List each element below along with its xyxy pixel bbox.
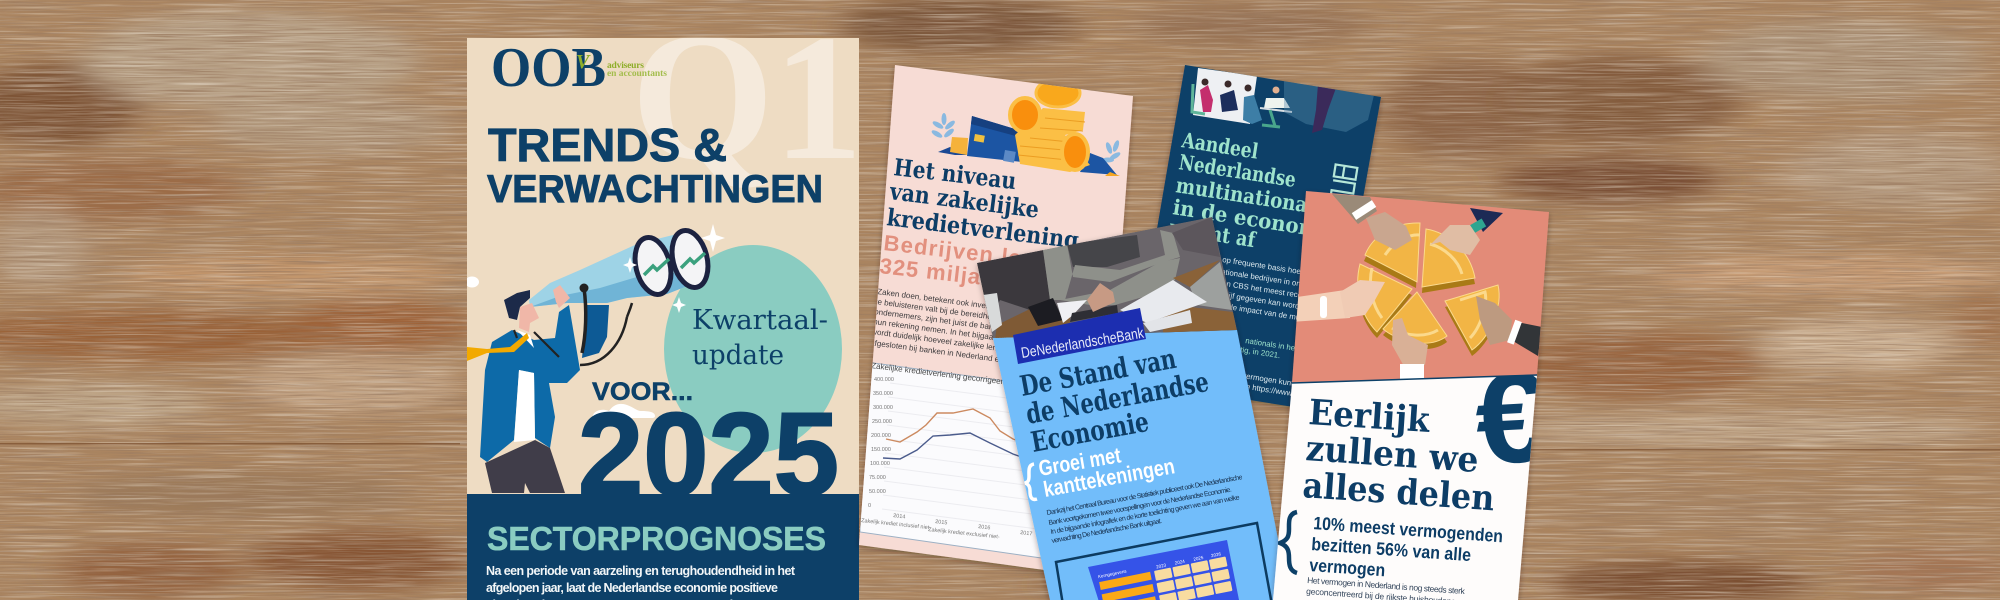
text block: blue intro: Bank voortgekomen twee voorspellingen voor de Nederlandse Economie. xyxy=(1048,486,1232,527)
heading: Het niveau: van zakelijke xyxy=(887,177,1041,224)
subheading: Bedrijven lenen xyxy=(880,235,1019,287)
text block: blue intro: Dankzij het Centraal Bureau voor de Statistiek publiceert ook De Nederlandsche xyxy=(1046,474,1243,517)
number: 2025: 2025 xyxy=(578,389,839,521)
heading: De Stand van de Nederlandse Economie: De Stand van xyxy=(1017,342,1179,403)
text block: navy intro: zie https://www.cbs.nl xyxy=(1240,381,1315,401)
watermark Q1 xyxy=(640,38,854,188)
chart: credit line chart: 0 xyxy=(868,503,871,509)
panel: navy multinationals card xyxy=(1131,65,1381,412)
subheading: Groei met kanttekeningen xyxy=(1025,442,1177,502)
text block: navy intro xyxy=(1222,258,1300,396)
text block: blue intro xyxy=(1046,474,1243,545)
text block: navy intro: tig, in 2021. xyxy=(1240,345,1281,360)
text block: white intro: Het vermogen in Nederland is nog steeds sterk xyxy=(1307,575,1466,596)
panel: main poster xyxy=(465,0,863,600)
band: sectorprognoses: afgelopen jaar, laat de Nederlandse economie positieve xyxy=(486,581,778,595)
photo: hands on calculator xyxy=(977,217,1237,340)
chart: credit line chart: 250.000 xyxy=(872,419,892,425)
chart: credit line chart xyxy=(860,362,1041,558)
label: Kwartaal-update xyxy=(692,305,828,371)
band: sectorprognoses: Na een periode van aarzeling en terughoudendheid in het xyxy=(486,564,796,578)
text block: navy intro: ing xyxy=(1238,390,1249,401)
title xyxy=(486,128,821,203)
title: TRENDS & xyxy=(488,119,727,171)
table: forecast table: Kerngegevens xyxy=(1098,568,1128,579)
logo: OOB: V xyxy=(576,51,591,73)
table: forecast table: 2024 xyxy=(1174,559,1186,566)
chart: credit line chart: 400.000 xyxy=(874,377,894,383)
text block: blue intro: In de bijgaande infografiek en de korte toelichting geven we aan van welke xyxy=(1050,494,1240,536)
subheading: Bedrijven lenen: Bedrijven lenen xyxy=(882,230,1066,276)
heading: De Stand van de Nederlandse Economie xyxy=(1019,354,1208,452)
title: VERWACHTINGEN xyxy=(487,168,823,211)
chart: credit line chart: Zakelijke kredietverlening gecorrigeerd voor bankleningen xyxy=(871,361,1075,395)
panel: pink credit card xyxy=(859,65,1133,577)
heading: Aandeel Nederlandse multinationals: multinationals xyxy=(1174,172,1326,220)
heading: Het niveau xyxy=(886,158,1079,246)
heading: Eerlijk zullen we alles delen: Eerlijk xyxy=(1307,392,1432,441)
heading: Het niveau: kredietverlening xyxy=(885,203,1080,254)
text block: navy intro: nationals in het bruto binnen xyxy=(1245,336,1343,360)
subheading: 10% meest vermogenden: 10% meest vermogenden xyxy=(1313,513,1504,546)
subheading: 10% meest vermogenden: bezitten 56% van alle xyxy=(1311,534,1472,565)
subheading: Groei met kanttekeningen: kanttekeningen xyxy=(1041,453,1177,502)
label: Kwartaal-update: Kwartaal- xyxy=(692,305,828,336)
table: forecast table: 2025 xyxy=(1193,555,1204,562)
panel: blue DNB card xyxy=(977,217,1290,600)
logo: OOB: adviseurs xyxy=(607,61,644,71)
text block: navy intro: wat de impact van de multi xyxy=(1213,300,1307,323)
chart: credit line chart: 2017 xyxy=(1020,530,1033,537)
heading: Aandeel Nederlandse multinationals: Nederlandse xyxy=(1177,149,1298,192)
table: forecast table: 2023 xyxy=(1156,562,1167,569)
logo: De Nederlandsche Bank: DeNederlandscheBank xyxy=(1020,325,1145,362)
logo: cbs xyxy=(1330,164,1357,201)
heading: VOOR...: VOOR... xyxy=(592,378,693,406)
table: forecast table: 2026 xyxy=(1211,551,1222,558)
label: Kwartaal-update: update xyxy=(692,340,784,371)
logo: De Nederlandsche Bank xyxy=(1013,308,1146,364)
text block: pink intro: te beluisteren valt bij de bereidheid van de banken om xyxy=(875,297,1066,331)
text block: pink intro: ondernemers, zijn het juist de banken die dit voor xyxy=(874,307,1048,339)
illustration: man with binoculars xyxy=(467,224,725,493)
chart: credit line chart: 350.000 xyxy=(873,391,893,397)
chart: credit line chart: 75.000 xyxy=(869,475,886,481)
text block: navy intro: ationale bedrijven in onze economie xyxy=(1221,267,1345,295)
chart: credit line chart: 150.000 xyxy=(871,447,891,453)
heading: Eerlijk zullen we alles delen xyxy=(1301,392,1496,519)
chart: credit line chart: 2016 xyxy=(978,524,991,531)
heading: Aandeel Nederlandse multinationals: in de economie xyxy=(1171,194,1341,245)
heading: Aandeel Nederlandse multinationals: Aandeel xyxy=(1179,127,1260,164)
illustration: business meeting xyxy=(1192,68,1374,133)
logo: OOB: en accountants xyxy=(607,69,667,79)
chart: credit line chart: 2015 xyxy=(935,519,948,526)
icon: curly brace xyxy=(1280,512,1297,573)
teal blob xyxy=(664,245,842,453)
text block: navy intro: vermogen kunt lezen xyxy=(1242,371,1315,391)
panel: Eerlijk card xyxy=(1273,191,1552,600)
heading: Eerlijk zullen we alles delen: zullen we xyxy=(1304,428,1480,481)
chart: credit line chart: 2014 xyxy=(893,513,906,520)
subheading: Groei met kanttekeningen: Groei met xyxy=(1037,442,1123,481)
band: sectorprognoses xyxy=(467,494,859,600)
text block: navy intro: bekijf gegeven kan worden xyxy=(1216,289,1309,312)
text block: blue intro: verwachting De Nederlandsche Bank uitgaat. xyxy=(1051,518,1163,545)
icon: euro sign: € xyxy=(1472,342,1552,492)
icon: coins and bank card xyxy=(931,79,1121,176)
chart: credit line chart: 200.000 xyxy=(871,433,891,439)
text block: pink intro: Zaken doen, betekent ook investeren. Als ondernemer xyxy=(877,287,1069,321)
logo: OOB xyxy=(494,48,667,86)
text block: navy intro: van CBS het meest recente xyxy=(1218,278,1313,302)
chart: credit line chart: 300.000 xyxy=(873,405,893,411)
chart: credit line chart: 100.000 xyxy=(870,461,890,467)
watermark Q1: Q xyxy=(631,0,774,198)
text block: navy intro: op frequente basis hoeveel xyxy=(1222,255,1316,278)
text block: pink intro: wordt duidelijk hoeveel zakelijke leningen hier xyxy=(870,327,1033,357)
heading: Het niveau: Het niveau xyxy=(892,153,1018,195)
chart: credit line chart: Zakelijk krediet inclusief niet- xyxy=(861,518,932,531)
clouds xyxy=(465,276,655,418)
watermark Q1: 1 xyxy=(773,0,863,197)
text block: pink intro xyxy=(874,288,1006,362)
logo: OOB: OOB xyxy=(491,37,606,99)
chart: credit line chart: Zakelijk krediet exclusief niet- xyxy=(928,527,1000,541)
subheading: 10% meest vermogenden: vermogen xyxy=(1309,555,1386,580)
text block: pink intro: afgesloten bij banken in Nederland en hoe die lopen xyxy=(870,338,1054,371)
chart: credit line chart: 50.000 xyxy=(869,489,886,495)
text block: pink intro: hun rekening nemen. In het bijgaande overzicht xyxy=(873,317,1042,348)
heading: Aandeel Nederlandse multinationals: neemt af xyxy=(1167,214,1259,253)
heading: Aandeel Nederlandse multinationals xyxy=(1170,132,1306,248)
subheading: Bedrijven lenen: 325 miljard xyxy=(878,253,1006,292)
band: sectorprognoses: SECTORPROGNOSES xyxy=(487,520,826,557)
heading: De Stand van de Nederlandse Economie: de Nederlandse xyxy=(1023,365,1211,431)
heading: Eerlijk zullen we alles delen: alles delen xyxy=(1301,465,1496,519)
illustration: hands sharing coin xyxy=(1290,194,1542,380)
subheading: 10% meest vermogenden xyxy=(1309,513,1504,580)
heading: De Stand van de Nederlandse Economie: Economie xyxy=(1028,405,1151,459)
table: forecast table xyxy=(1056,523,1272,600)
